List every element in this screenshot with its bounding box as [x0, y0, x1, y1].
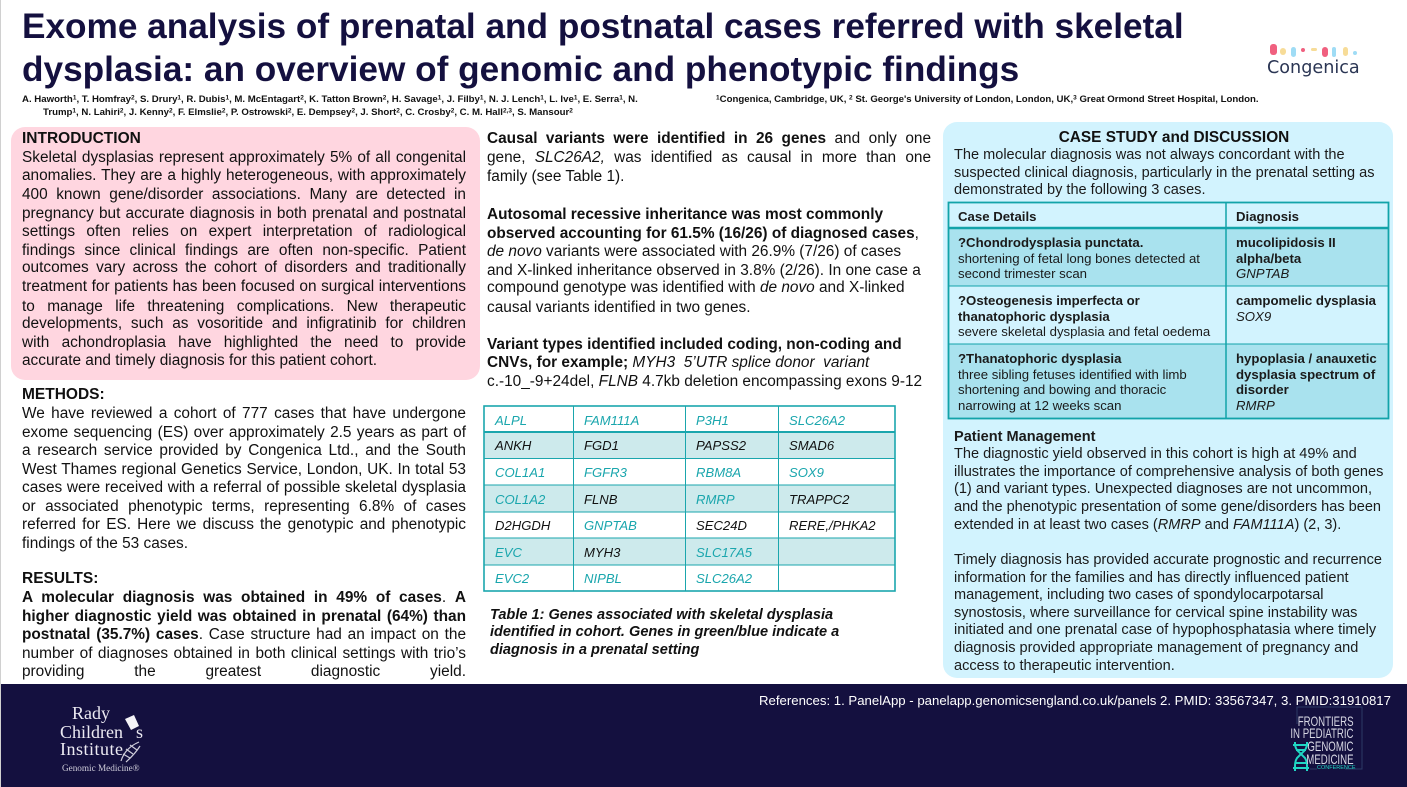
table caption: diagnosis in a prenatal setting: [490, 642, 699, 658]
row: thanatophoric dysplasia: disorder: [1236, 382, 1289, 397]
table caption: Table 1: Genes associated with skeletal dysplasia: [490, 606, 833, 622]
text: inheritance: observed accounting for 61.5% (16/26) of diagnosed cases,: [487, 225, 919, 242]
text: inheritance: Autosomal recessive inheritance was most commonly: [487, 206, 883, 223]
text: case study intro: [954, 147, 1374, 198]
heading: results: RESULTS:: [22, 570, 98, 587]
row: osteogenesis imperfecta: severe skeletal dysplasia and fetal oedema: [958, 324, 1210, 339]
gene names: FGD1: [584, 438, 619, 453]
row: osteogenesis imperfecta: [958, 293, 1376, 339]
logo conference label: CONFERENCE: [1317, 765, 1356, 771]
logo wordmark: GENOMIC: [1308, 738, 1354, 754]
text: methods body: West Thames regional Genetics Service, London, UK. In total 53: [22, 460, 466, 478]
authors: Trump1, N. Lahiri2, J. Kenny2, F. Elmslie2, P. Ostrowski2, E. Dempsey2, J. Short2, C. Crosby2, C. M. Hall2,3, S. Mansour2: [43, 107, 573, 118]
heading: introduction: INTRODUCTION: [22, 130, 141, 147]
authors: A. Haworth1, T. Homfray2, S. Drury1, R. Dubis1, M. McEntagart2, K. Tatton Brown2, H. Savage1, J. Filby1, N. J. Lench1, L. Ive1, E. Serra1, N.: [22, 94, 638, 105]
row: osteogenesis imperfecta: ?Osteogenesis imperfecta or: [958, 293, 1140, 308]
text: introduction body: with achondroplasia have highlighted the need to provide: [22, 334, 466, 351]
text: methods body: or associated phenotypic terms, representing 6.8% of cases: [22, 498, 466, 514]
logo wordmark: MEDICINE: [1307, 751, 1354, 767]
text: timely diagnosis: information for the families and has directly influenced patient: [954, 570, 1349, 586]
table: cases: [948, 202, 1390, 420]
header row: Diagnosis: [1236, 209, 1299, 224]
title: [22, 7, 1184, 89]
logo: Rady Children's Institute: Children: [60, 722, 123, 742]
text: diagnostic yield: extended in at least two cases (RMRP and FAM111A) (2, 3).: [954, 517, 1341, 533]
text: diagnostic yield: and the phenotypic presentation of some gene/disorders has been: [954, 499, 1381, 515]
gene names: COL1A1: [495, 465, 545, 480]
gene names: EVC: [495, 545, 522, 560]
text: diagnostic yield: (1) and variant types. Unexpected diagnoses are not uncommon,: [954, 481, 1372, 497]
header row: [958, 209, 1299, 224]
gene names: PAPSS2: [696, 438, 746, 453]
text: variant types: [487, 336, 922, 390]
panel: case study and discussion: [943, 122, 1393, 678]
text: results body: postnatal (35.7%) cases. Case structure had an impact on the: [22, 626, 466, 643]
text: introduction body: developments, such as vosoritide and infigratinib for children: [22, 315, 466, 332]
text: methods body: We have reviewed a cohort of 777 cases that have undergone: [22, 405, 466, 422]
gene names: TRAPPC2: [789, 492, 849, 507]
gene names: NIPBL: [584, 571, 622, 586]
text: inheritance: compound genotype was identified with de novo and X-linked: [487, 278, 905, 296]
gene names: SMAD6: [789, 438, 834, 453]
text: case study intro: The molecular diagnosis was not always concordant with the: [954, 147, 1345, 163]
logo wordmark: IN PEDIATRIC: [1291, 725, 1354, 741]
text: causal variants: [487, 130, 931, 185]
section: results: [22, 570, 466, 680]
references: References: 1. PanelApp - panelapp.genomicsengland.co.uk/panels 2. PMID: 33567347, 3. PMID:31910817: [759, 693, 1391, 708]
text: causal variants: gene, SLC26A2, was identified as causal in more than one: [487, 149, 931, 166]
logo wordmark: [1291, 712, 1354, 767]
row: chondrodysplasia punctata: shortening of fetal long bones detected at: [958, 251, 1200, 266]
text: methods body: [22, 405, 466, 552]
text: timely diagnosis: access to therapeutic intervention.: [954, 658, 1175, 674]
text: introduction body: accurate and timely diagnosis for this patient cohort.: [22, 352, 377, 369]
logo: Rady Children's Institute: Institute: [60, 739, 124, 759]
text: case study intro: suspected clinical diagnosis, particularly in the prenatal setting as: [954, 165, 1374, 181]
text: results body: [22, 589, 466, 680]
text: variant types: Variant types identified included coding, non-coding and: [487, 336, 902, 353]
text: timely diagnosis: initiated and one prenatal case of hypophosphatasia where timely: [954, 622, 1376, 638]
row: osteogenesis imperfecta: thanatophoric dysplasia: [958, 309, 1110, 324]
text: inheritance: causal variants identified in two genes.: [487, 298, 751, 316]
text: timely diagnosis: synostosis, where surveillance for cervical spine instability was: [954, 605, 1357, 621]
row: thanatophoric dysplasia: narrowing at 12 weeks scan: [958, 398, 1121, 413]
text: case study intro: demonstrated by the following 3 cases.: [954, 182, 1205, 198]
text: introduction body: pregnancy but accurate diagnosis in both prenatal and postnatal: [22, 205, 466, 222]
row: thanatophoric dysplasia: dysplasia spectrum of: [1236, 367, 1375, 382]
gene names: FGFR3: [584, 465, 627, 480]
text: timely diagnosis: management, including two cases of spondylocarpotarsal: [954, 587, 1324, 603]
text: results body: number of diagnoses obtained in both clinical settings with trio’s: [22, 644, 466, 662]
text: diagnostic yield: [954, 446, 1383, 533]
text: introduction body: treatment for patients has been focused on surgical interventions: [22, 278, 466, 295]
logo: Frontiers in Pediatric Genomic Medicine: [1291, 706, 1362, 771]
heading: methods: METHODS:: [22, 386, 105, 403]
gene names: EVC2: [495, 571, 529, 586]
text: introduction body: findings since clinical findings are often non-specific. Patient: [22, 242, 466, 259]
text: introduction body: outcomes vary across the cohort of disorders and traditionally: [22, 259, 466, 276]
row: chondrodysplasia punctata: GNPTAB: [1236, 266, 1289, 281]
gene names: SOX9: [789, 465, 824, 480]
row: chondrodysplasia punctata: second trimester scan: [958, 266, 1087, 281]
text: results body: higher diagnostic yield was obtained in prenatal (64%) than: [22, 608, 466, 624]
gene names: ALPL: [495, 412, 527, 428]
text: results body: providing the greatest diagnostic yield.: [22, 663, 466, 680]
text: causal variants: family (see Table 1).: [487, 168, 624, 185]
gene names: ANKH: [495, 438, 531, 453]
gene names: RMRP: [696, 492, 735, 507]
gene names: MYH3: [584, 545, 620, 560]
text: introduction body: to manage life threatening complications. New therapeutic: [22, 298, 466, 315]
row: osteogenesis imperfecta: campomelic dysplasia: [1236, 293, 1376, 308]
text: introduction body: anomalies. They are a highly heterogeneous, with approximately: [22, 167, 466, 184]
left edge line: [0, 0, 1, 787]
row: thanatophoric dysplasia: [958, 351, 1377, 413]
heading: case study: CASE STUDY and DISCUSSION: [1059, 128, 1289, 146]
authors: [22, 94, 638, 118]
gene names: RBM8A: [696, 465, 741, 480]
section: methods: [22, 386, 466, 552]
row: thanatophoric dysplasia: hypoplasia / anauxetic: [1236, 351, 1377, 366]
text: variant types: c.-10_-9+24del, FLNB 4.7kb deletion encompassing exons 9-12: [487, 373, 922, 390]
row: thanatophoric dysplasia: ?Thanatophoric dysplasia: [958, 351, 1121, 366]
text: timely diagnosis: Timely diagnosis has provided accurate prognostic and recurrence: [954, 552, 1382, 568]
text: introduction body: Skeletal dysplasias represent approximately 5% of all congenital: [22, 149, 466, 166]
logo wordmark: FRONTIERS: [1298, 712, 1354, 728]
gene names: SEC24D: [696, 518, 747, 533]
logo: Rady Children's Institute: Rady: [72, 703, 110, 723]
text: introduction body: [22, 149, 466, 369]
text: introduction body: settings often relies on expert interpretation of radiological: [22, 223, 466, 240]
text: methods body: referred for ES. Here we discuss the genotypic and phenotypic: [22, 516, 466, 533]
header row: Case Details: [958, 209, 1036, 224]
gene names: P3H1: [696, 412, 729, 428]
row: chondrodysplasia punctata: [958, 235, 1336, 281]
row: chondrodysplasia punctata: mucolipidosis II: [1236, 235, 1336, 250]
logo: Rady Children's Institute: Genomic Medicine®: [62, 763, 140, 773]
text: methods body: a research service provided by Congenica Ltd., and the South: [22, 442, 466, 459]
text: introduction body: 400 known gene/disorder associations. Many are detected in: [22, 186, 466, 203]
gene names: FAM111A: [584, 412, 639, 428]
gene names: SLC26A2: [696, 571, 752, 586]
gene names: RERE,/PHKA2: [789, 518, 876, 533]
panel: introduction: [11, 127, 480, 380]
text: diagnostic yield: The diagnostic yield observed in this cohort is high at 49% and: [954, 446, 1357, 462]
gene names: GNPTAB: [584, 518, 637, 533]
heading: patient management: Patient Management: [954, 429, 1095, 445]
title: Exome analysis of prenatal and postnatal cases referred with skeletal: [22, 7, 1184, 46]
row: thanatophoric dysplasia: RMRP: [1236, 398, 1275, 413]
row: chondrodysplasia punctata: alpha/beta: [1236, 251, 1301, 266]
row: osteogenesis imperfecta: SOX9: [1236, 309, 1271, 324]
text: methods body: findings of the 53 cases.: [22, 534, 188, 552]
logo: Congenica: Congenica: [1267, 58, 1360, 78]
gene names: D2HGDH: [495, 518, 550, 533]
text: methods body: cases were received with a referral of possible skeletal dysplasia: [22, 479, 466, 496]
table: genes: [483, 405, 896, 592]
gene names: SLC17A5: [696, 545, 752, 560]
title: dysplasia: an overview of genomic and phenotypic findings: [22, 50, 1019, 89]
table caption: identified in cohort. Genes in green/blue indicate a: [490, 624, 839, 640]
logo: Rady Children's Institute: [60, 703, 143, 773]
logo: Congenica: [1267, 44, 1360, 78]
row: thanatophoric dysplasia: three sibling fetuses identified with limb: [958, 367, 1187, 382]
text: timely diagnosis: diagnosis provided appropriate management of pregnancy and: [954, 640, 1358, 656]
logo: Rady Children's Institute: s: [136, 722, 143, 742]
text: timely diagnosis: [954, 552, 1382, 674]
text: results body: A molecular diagnosis was obtained in 49% of cases. A: [22, 589, 466, 606]
table caption: [490, 606, 839, 658]
text: causal variants: Causal variants were identified in 26 genes and only one: [487, 130, 931, 147]
affiliations: 1Congenica, Cambridge, UK, 2 St. George's University of London, London, UK,3 Great Ormond Street Hospital, London.: [716, 94, 1259, 105]
text: inheritance: de novo variants were associated with 26.9% (7/26) of cases: [487, 243, 901, 260]
gene names: SLC26A2: [789, 412, 845, 428]
gene names: FLNB: [584, 492, 617, 507]
text: methods body: exome sequencing (ES) over approximately 2.5 years as part of: [22, 424, 466, 440]
row: thanatophoric dysplasia: shortening and bowing and thoracic: [958, 382, 1166, 397]
row: chondrodysplasia punctata: ?Chondrodysplasia punctata.: [958, 235, 1143, 250]
gene names: [494, 412, 876, 586]
text: diagnostic yield: illustrates the importance of comprehensive analysis of both genes: [954, 464, 1383, 480]
gene names: COL1A2: [495, 492, 545, 507]
text: inheritance: and X-linked inheritance observed in 3.8% (2/26). In one case a: [487, 262, 921, 278]
text: inheritance: [487, 206, 921, 316]
footer band: [1, 684, 1407, 787]
text: variant types: CNVs, for example; MYH3 5’UTR splice donor variant: [487, 354, 869, 371]
